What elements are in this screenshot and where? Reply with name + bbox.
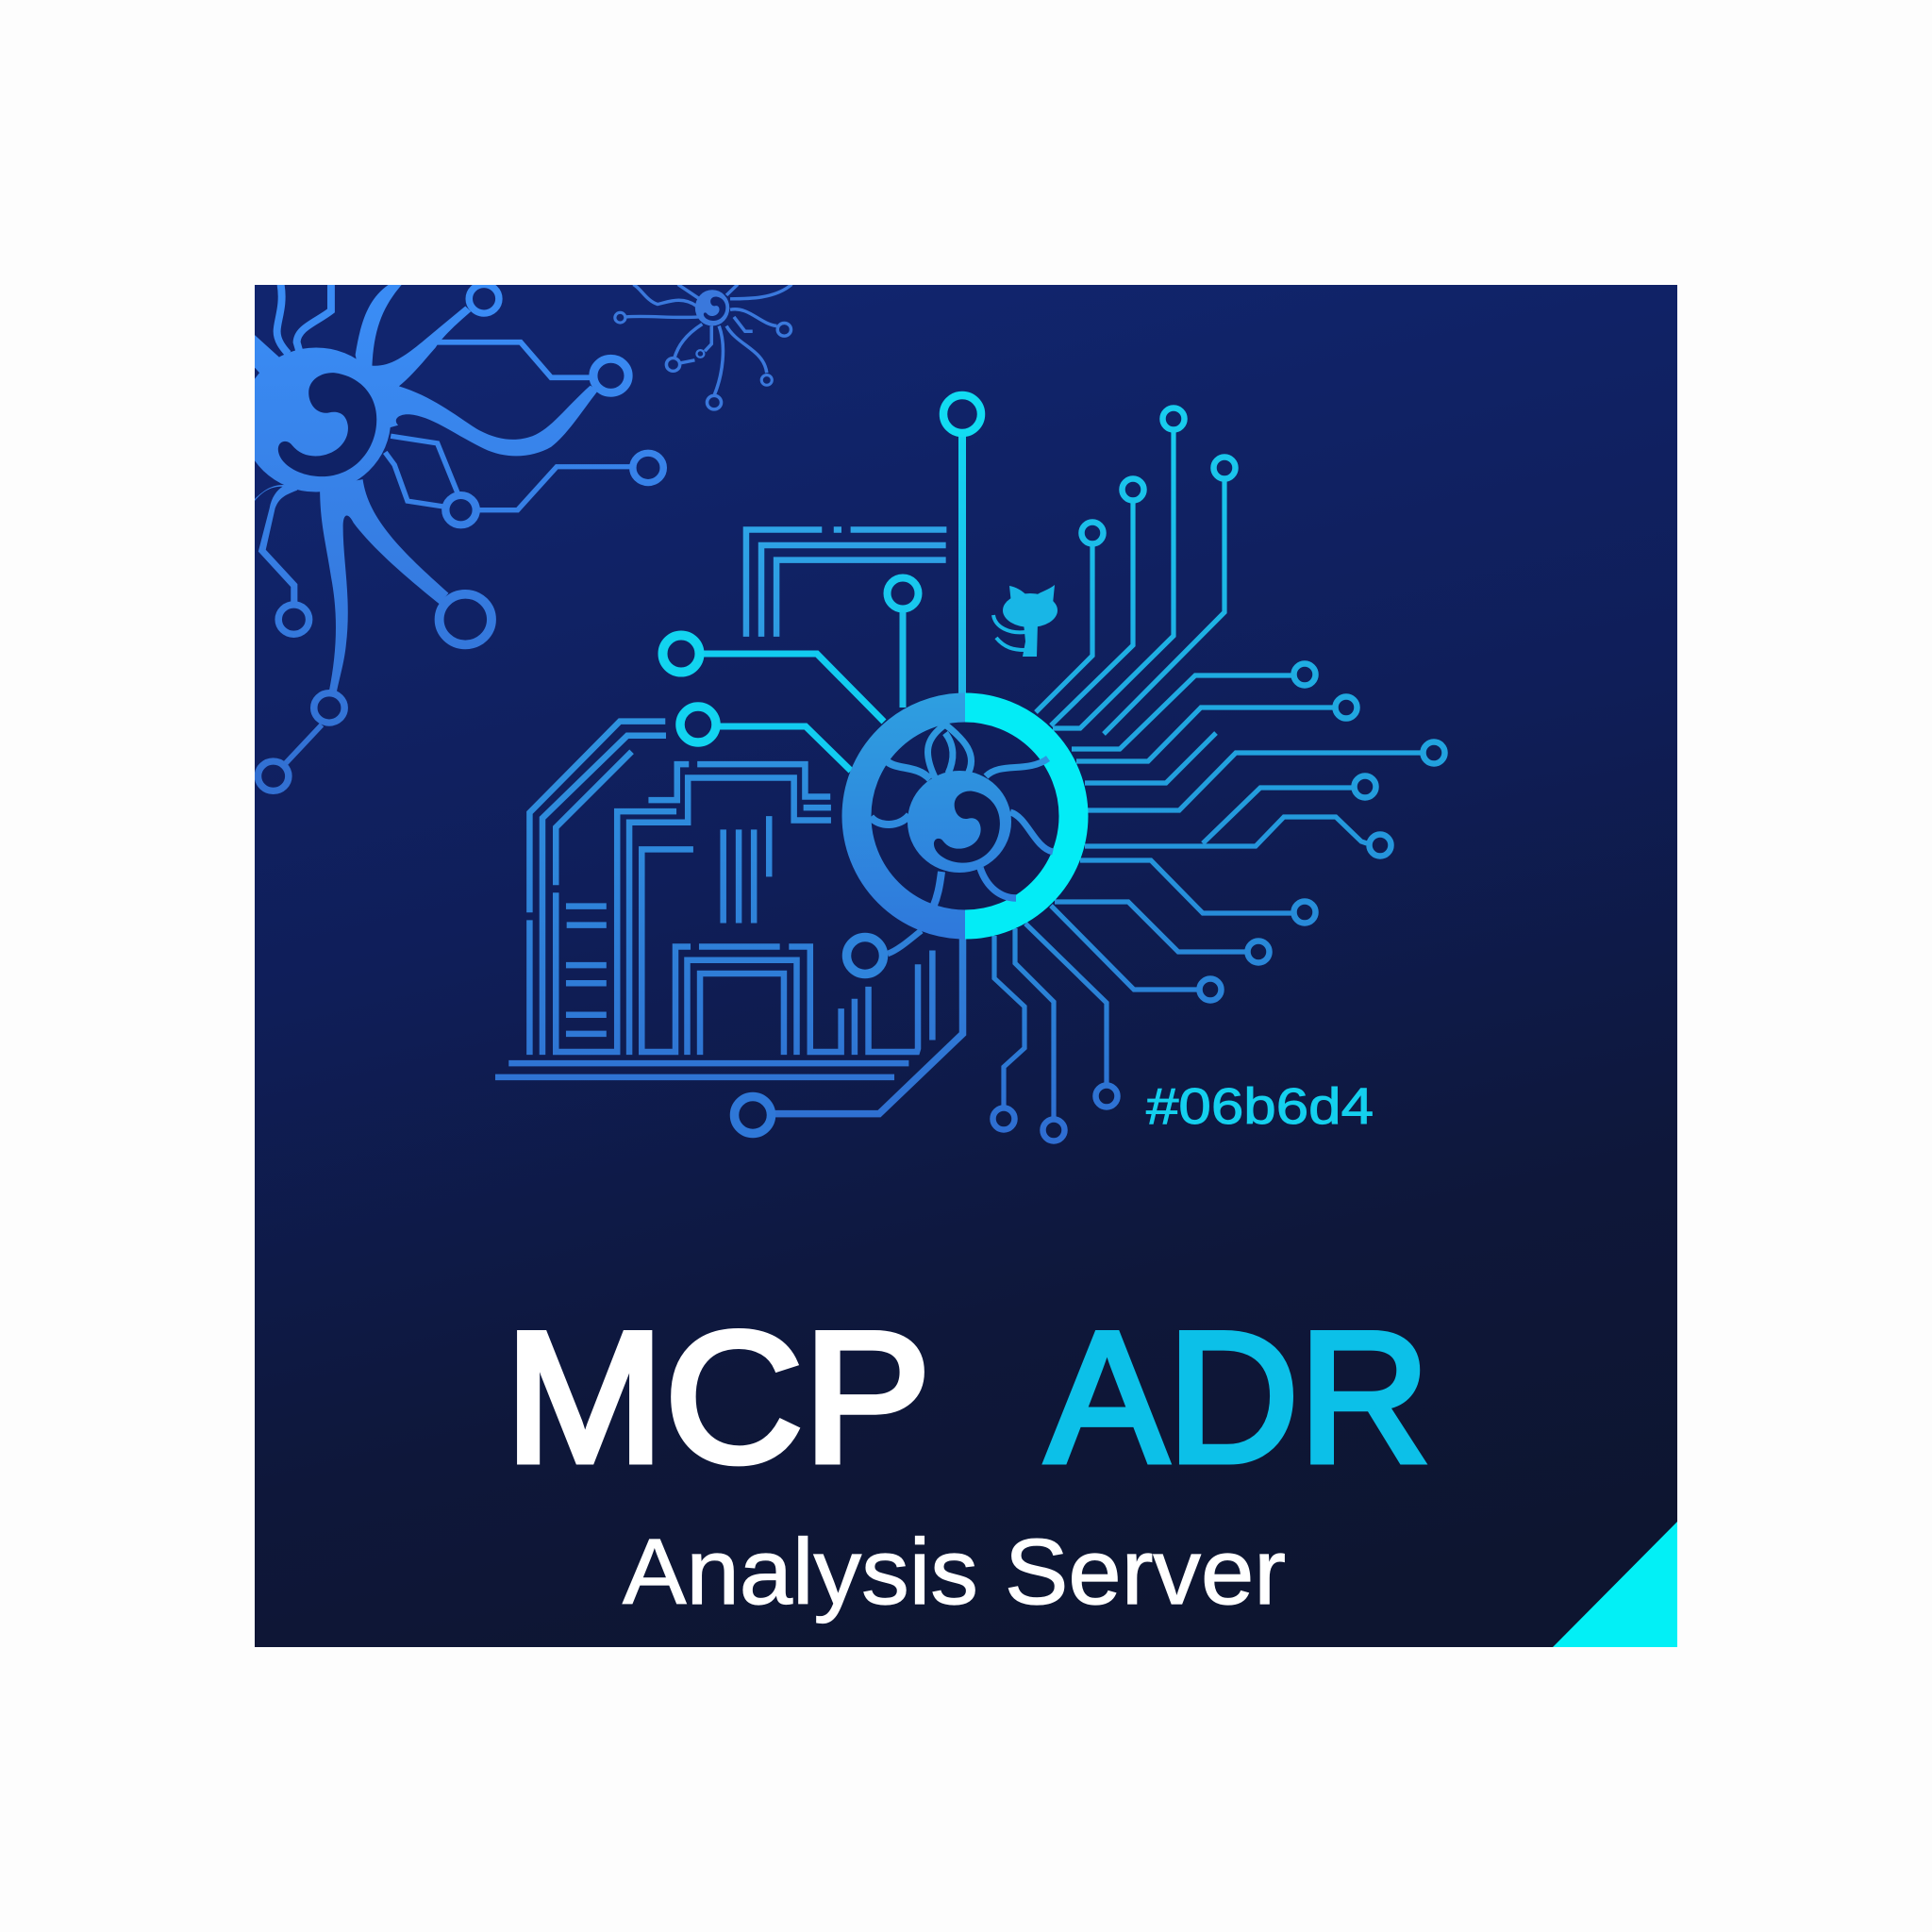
title word: MCP: MCP — [505, 1293, 931, 1501]
circuit: cyan connectors to core — [662, 395, 981, 1134]
corner accent triangle — [1553, 1522, 1677, 1647]
colour code label: #06b6d4 — [1146, 1078, 1374, 1135]
title — [505, 1293, 1430, 1501]
central neuron body — [908, 771, 1011, 873]
panel: dark navy background — [255, 285, 1677, 1647]
circuit: left building traces — [495, 530, 963, 1114]
title word: ADR: ADR — [1046, 1293, 1430, 1501]
central neuron dendrites — [871, 724, 1053, 908]
icon: github octocat — [993, 585, 1058, 657]
icon: small neuron top — [615, 284, 791, 409]
central neuron swirl — [934, 791, 1000, 863]
central neuron core ring — [857, 708, 1074, 924]
icon: large neuron top left — [242, 284, 663, 791]
subtitle: Analysis Server — [623, 1520, 1286, 1624]
circuit: radiating right traces — [992, 408, 1445, 1141]
